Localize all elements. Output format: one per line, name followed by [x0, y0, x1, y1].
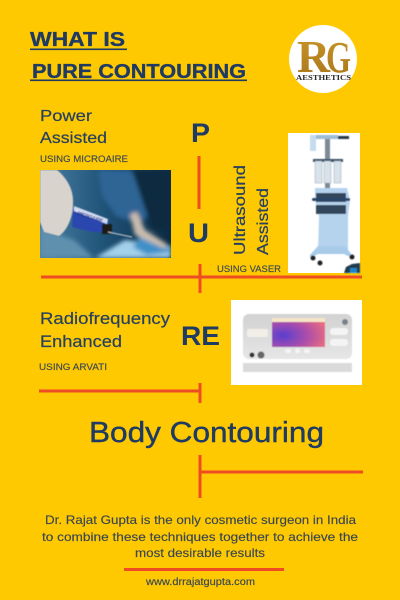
using arvati label: USING ARVATI	[39, 362, 107, 372]
power assisted text: Power	[40, 108, 93, 125]
letters RE: RE	[181, 321, 220, 351]
power assisted text	[40, 108, 107, 147]
photo: microaire device	[40, 170, 171, 258]
title: WHAT IS	[30, 29, 125, 51]
vaser machine image	[288, 133, 360, 273]
using vaser label: USING VASER	[217, 264, 282, 274]
radiofrequency enhanced text	[40, 309, 171, 351]
divider under radiofrequency	[39, 383, 202, 403]
letter U: U	[188, 218, 209, 248]
radiofrequency enhanced text: Enhanced	[40, 332, 122, 351]
description: most desirable results	[135, 546, 265, 560]
horizontal divider with tick	[41, 264, 362, 293]
title	[30, 29, 247, 83]
title: PURE CONTOURING	[32, 61, 246, 83]
ultrasound assisted text: Assisted	[255, 188, 272, 255]
using microaire label: USING MICROAIRE	[40, 154, 128, 164]
logo	[289, 25, 357, 93]
description: to combine these techniques together to achieve the	[42, 530, 358, 544]
description: Dr. Rajat Gupta is the only cosmetic surgeon in India	[45, 513, 356, 527]
arvati device image	[231, 300, 362, 385]
photo: microaire device: MICROAIRE	[76, 211, 104, 225]
power assisted text: Assisted	[40, 130, 107, 147]
ultrasound assisted text: Ultrasound	[232, 165, 249, 255]
logo: G	[326, 33, 351, 82]
ultrasound assisted text	[232, 165, 272, 255]
radiofrequency enhanced text: Radiofrequency	[40, 309, 171, 328]
body contouring heading: Body Contouring	[89, 417, 324, 449]
logo: R	[297, 32, 331, 82]
logo: AESTHETICS	[296, 73, 351, 82]
divider: P to U	[198, 156, 200, 209]
website: www.drrajatgupta.com	[145, 577, 255, 588]
footer divider	[124, 568, 284, 571]
letter P: P	[191, 118, 210, 148]
description	[42, 513, 358, 560]
divider under heading	[198, 455, 363, 498]
